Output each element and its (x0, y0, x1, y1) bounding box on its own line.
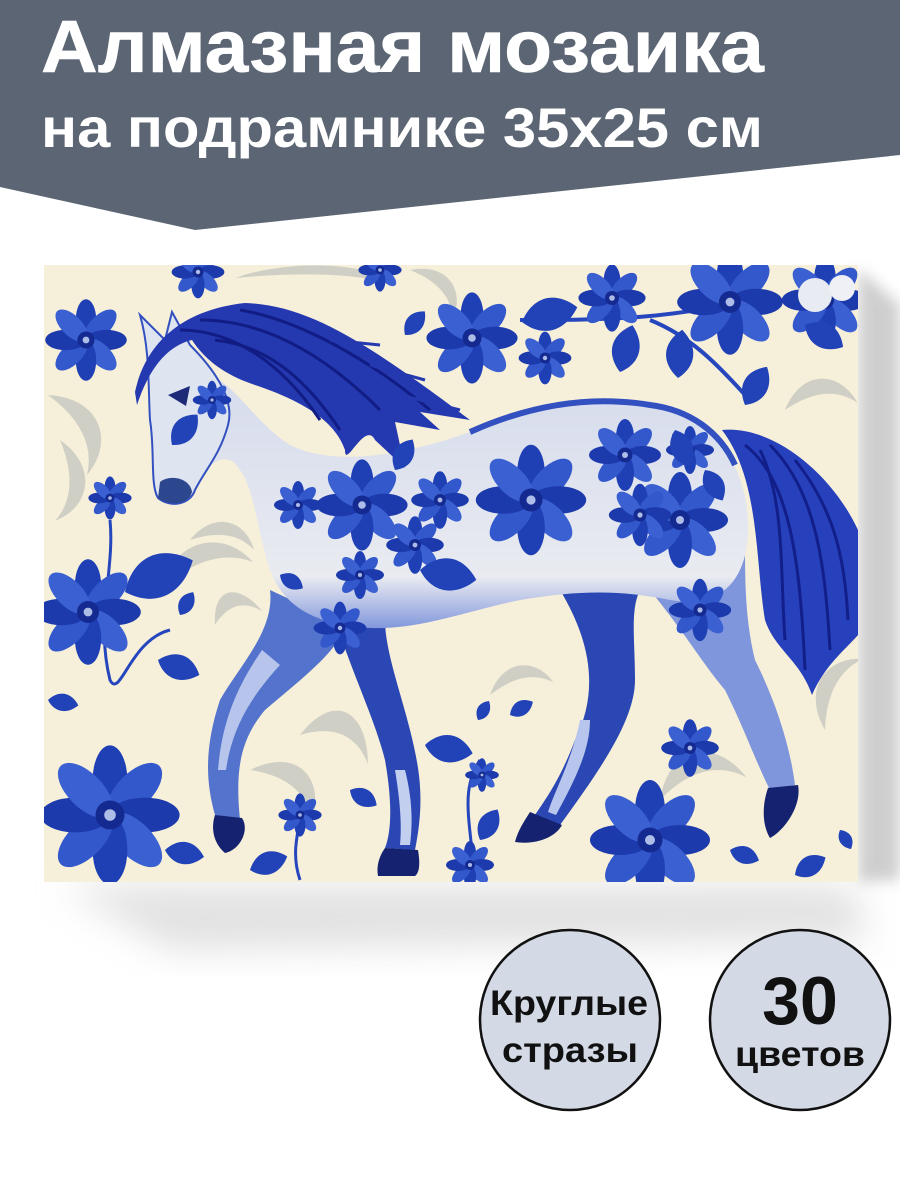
horse (135, 303, 858, 876)
far hind and front legs (535, 590, 640, 825)
mane (135, 303, 470, 468)
badge: round rhinestones: Круглые (490, 984, 648, 1023)
title: Алмазная мозаика (41, 5, 765, 88)
hooves (213, 815, 245, 853)
near hind leg (656, 556, 795, 788)
grey background swirls (37, 256, 864, 823)
badge: round rhinestones (480, 930, 660, 1110)
badge: 30 colours: 30 (762, 963, 838, 1039)
header banner (0, 0, 900, 230)
badge: 30 colours: цветов (735, 1035, 865, 1074)
painting: blue horse on cream canvas (35, 246, 868, 900)
body (190, 372, 748, 628)
head (140, 312, 229, 504)
floral border left (35, 299, 206, 885)
canvas background (44, 265, 858, 882)
chest floral decoration (476, 445, 586, 555)
canvas shadow (60, 268, 900, 950)
hip floral decoration (589, 419, 661, 491)
near front leg (208, 590, 345, 820)
floral border top right (172, 265, 858, 405)
floral border bottom (250, 700, 852, 882)
tail (722, 430, 858, 695)
badge: round rhinestones: стразы (502, 1031, 638, 1070)
subtitle: на подрамнике 35х25 см (41, 96, 763, 159)
badge: 30 colours (710, 930, 890, 1110)
